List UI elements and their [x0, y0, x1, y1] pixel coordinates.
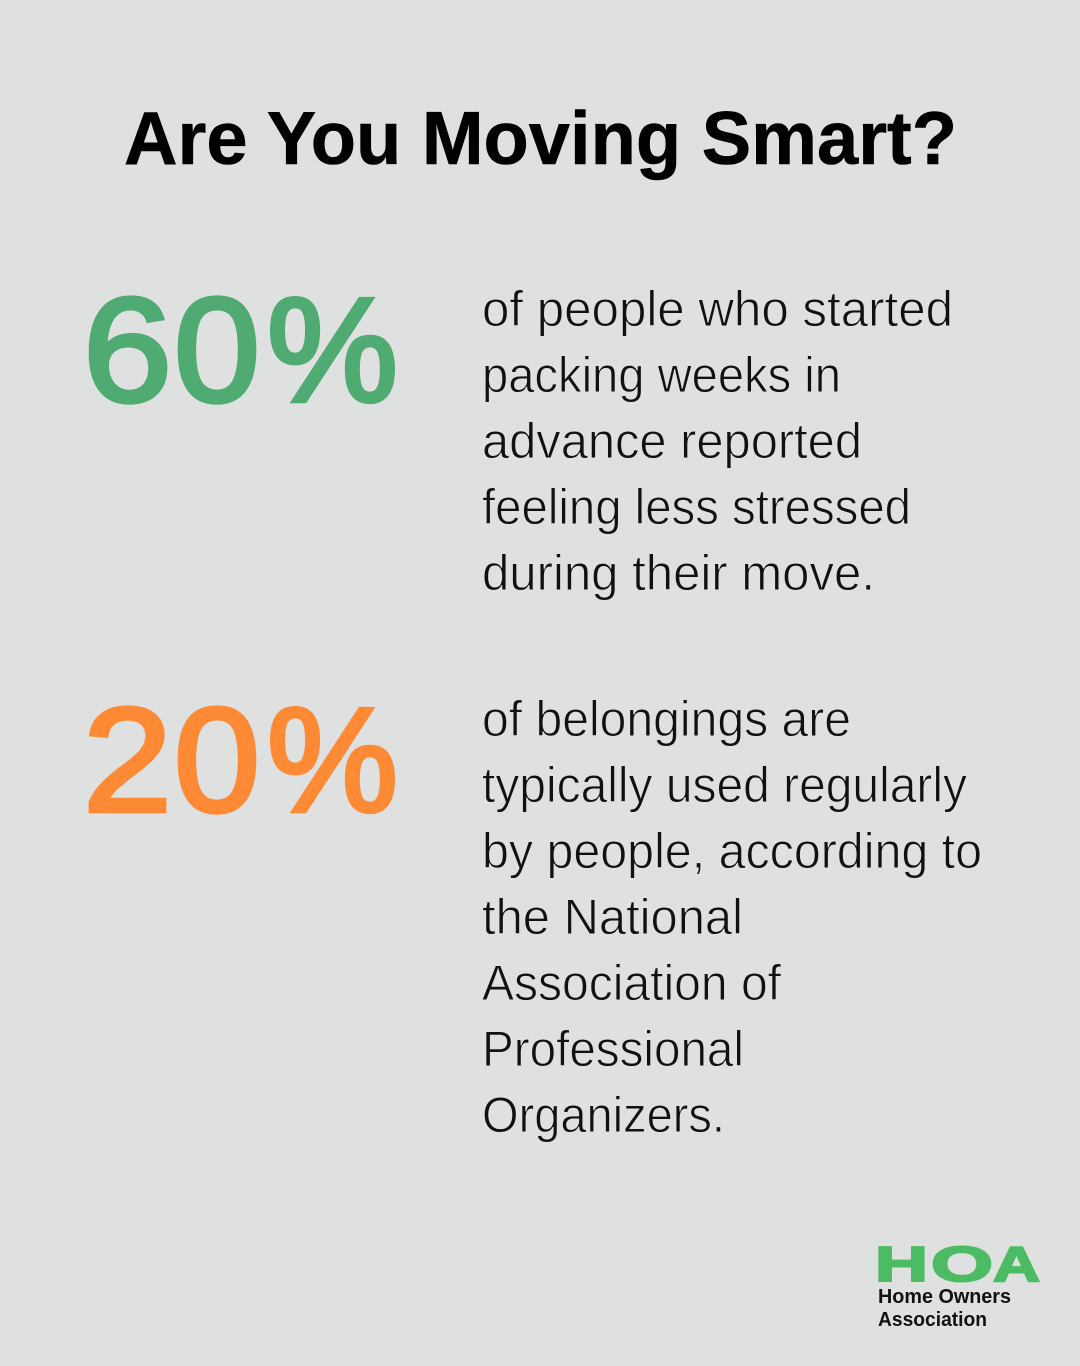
logo mark: HOA	[875, 1238, 1040, 1292]
stat description: 20%: by people, according to	[482, 823, 982, 879]
stat number: 20%	[83, 678, 398, 843]
stat description: 60%: during their move.	[482, 545, 875, 601]
stat description: 60%: advance reported	[482, 413, 862, 469]
stat panel: 60%	[83, 268, 953, 601]
stat number: 60%: 0	[174, 268, 260, 433]
stat description: 60%	[482, 281, 953, 601]
stat number: 60%: %	[267, 268, 398, 433]
stat number: 60%: 6	[83, 268, 172, 433]
stat number: 20%: 2	[83, 678, 172, 843]
stat description: 20%: the National	[482, 889, 743, 945]
stat panel: 20%	[83, 678, 982, 1143]
stat description: 20%: typically used regularly	[482, 757, 967, 813]
logo text	[878, 1286, 1011, 1331]
stat number: 20%: 0	[174, 678, 260, 843]
logo text: Association	[878, 1309, 987, 1331]
stat description: 20%	[482, 691, 982, 1143]
logo mark: HOA: A	[993, 1238, 1040, 1292]
stat description: 60%: of people who started	[482, 281, 953, 337]
stat description: 20%: Association of	[482, 955, 781, 1011]
logo mark: HOA: H	[875, 1238, 928, 1292]
stat number: 60%	[83, 268, 398, 433]
logo text: Home Owners	[878, 1286, 1011, 1308]
stat description: 60%: feeling less stressed	[482, 479, 911, 535]
stat number: 20%: %	[267, 678, 398, 843]
stat description: 20%: of belongings are	[482, 691, 851, 747]
stat description: 60%: packing weeks in	[482, 347, 841, 403]
logo: Home Owners Association	[875, 1238, 1040, 1331]
stat description: 20%: Organizers.	[482, 1087, 725, 1143]
stat description: 20%: Professional	[482, 1021, 744, 1077]
logo mark: HOA: O	[931, 1238, 993, 1292]
title: Are You Moving Smart?	[124, 96, 957, 180]
